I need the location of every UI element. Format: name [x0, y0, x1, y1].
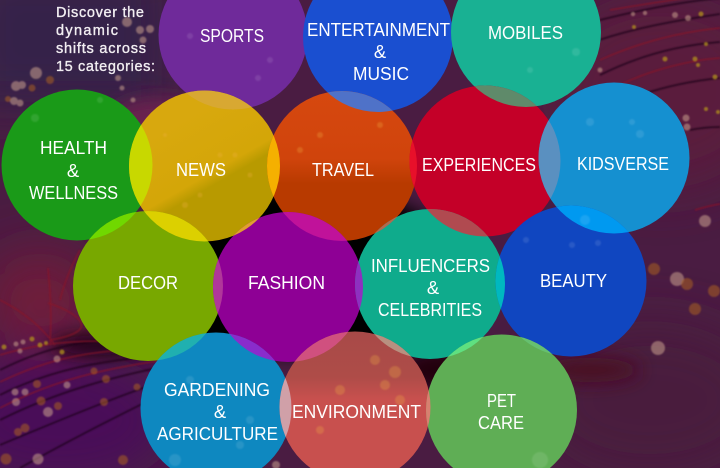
circle: gardening and agriculture: & — [214, 401, 227, 422]
circle: mobiles — [451, 0, 601, 107]
circle: health and wellness: HEALTH — [40, 137, 107, 158]
circle: fashion: FASHION — [248, 272, 325, 293]
circle: influencers and celebrities: & — [427, 277, 440, 298]
circle: sports — [158, 0, 308, 110]
intro text: dynamic — [56, 23, 118, 39]
circle: beauty: BEAUTY — [540, 270, 607, 291]
circle: entertainment and music: ENTERTAINMENT — [307, 19, 450, 40]
circle: gardening and agriculture: AGRICULTURE — [157, 423, 278, 444]
circle: beauty — [496, 206, 646, 356]
intro text: 15 categories: — [56, 59, 155, 75]
intro text: Discover the — [56, 5, 144, 21]
circle: kidsverse — [538, 82, 690, 234]
intro text — [56, 5, 155, 75]
circle: sports: SPORTS — [200, 25, 264, 46]
circle: pet care: PET — [487, 390, 516, 411]
circle: kidsverse: KIDSVERSE — [577, 153, 669, 174]
circle overlap lenses — [89, 86, 628, 437]
circle: environment — [280, 332, 430, 468]
circle: decor — [73, 211, 223, 361]
circle: entertainment and music — [303, 0, 453, 112]
circle: pet care — [426, 334, 577, 468]
circle: influencers and celebrities — [355, 209, 505, 359]
circle: mobiles: MOBILES — [488, 22, 563, 43]
circle: travel — [267, 91, 417, 241]
circle: environment: ENVIRONMENT — [292, 401, 421, 422]
circle: entertainment and music: & — [374, 41, 387, 62]
circle: fashion — [213, 212, 363, 362]
circle: experiences — [410, 86, 560, 236]
circle: health and wellness: WELLNESS — [29, 182, 118, 203]
circle: travel: TRAVEL — [312, 159, 374, 180]
circle: news: NEWS — [176, 159, 226, 180]
circle: entertainment and music: MUSIC — [353, 63, 409, 84]
circle: health and wellness: & — [67, 160, 80, 181]
intro text: shifts across — [56, 41, 146, 57]
circle: experiences: EXPERIENCES — [422, 154, 536, 175]
circle: gardening and agriculture — [140, 332, 292, 468]
circle: influencers and celebrities: CELEBRITIES — [378, 299, 482, 320]
circle: pet care: CARE — [478, 412, 524, 433]
circle: decor: DECOR — [118, 272, 178, 293]
faint dots inside circles — [31, 33, 644, 468]
circle: news — [129, 90, 280, 242]
circle: influencers and celebrities: INFLUENCERS — [371, 255, 490, 276]
circle: gardening and agriculture: GARDENING — [164, 379, 270, 400]
gaps between circles — [200, 215, 435, 365]
circle: health and wellness — [2, 90, 152, 240]
